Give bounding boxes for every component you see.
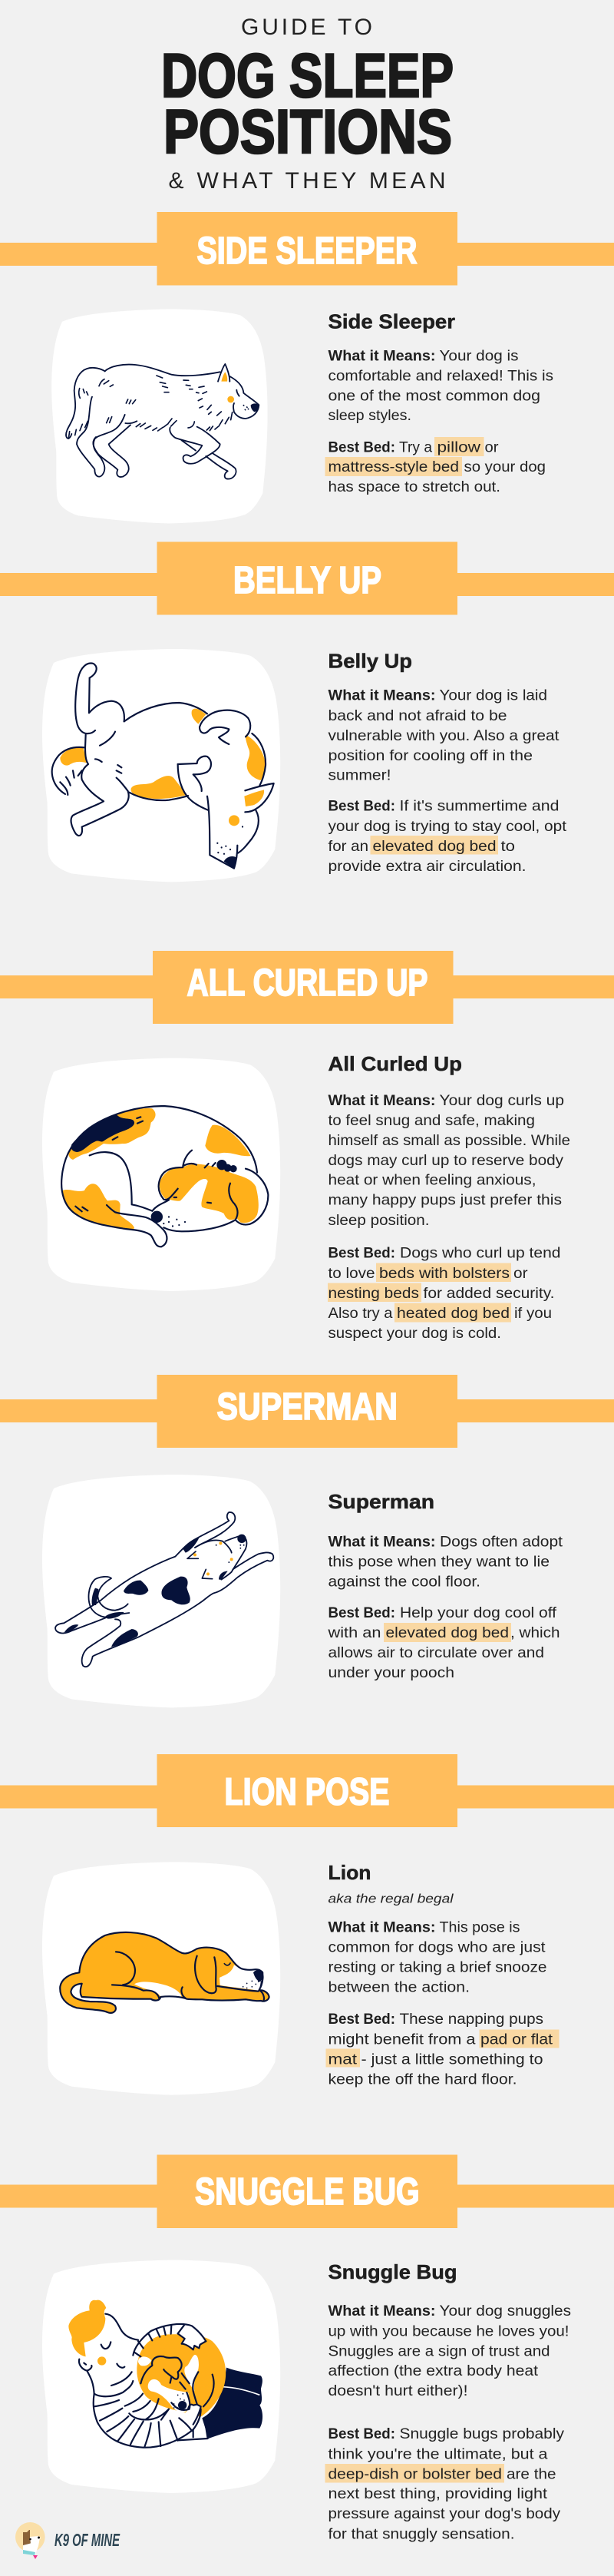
text block: lion pose: might benefit from a (328, 2031, 476, 2048)
text block: belly up: elevated dog bed (373, 838, 496, 855)
text block: lion pose: Best Bed: (328, 2011, 395, 2028)
text block: lion pose: mat (328, 2051, 358, 2068)
text block: all curled up: himself as small as possible. While (328, 1132, 570, 1149)
text block: belly up: position for cooling off in the (328, 747, 533, 764)
text block: belly up: for an (328, 838, 368, 855)
title: GUIDE TO (241, 15, 372, 40)
text block: snuggle bug: Snuggle bugs probably (399, 2425, 564, 2442)
text block: all curled up (328, 1052, 570, 1342)
text block: snuggle bug: What it Means: (328, 2303, 436, 2319)
banner: belly up: BELLY UP (233, 560, 381, 601)
text block: all curled up: beds with bolsters (379, 1265, 510, 1282)
text block: lion pose: resting or taking a brief snooze (328, 1958, 546, 1975)
text block: lion pose: These napping pups (399, 2011, 543, 2028)
text block: all curled up: heat or when feeling anxious, (328, 1172, 536, 1189)
text block: superman: Best Bed: (328, 1604, 395, 1621)
text block: lion pose: - just a little something to (361, 2051, 543, 2068)
text block: all curled up: dogs may curl up to reserve body (328, 1152, 563, 1169)
text block: all curled up: to feel snug and safe, making (328, 1112, 535, 1129)
text block: snuggle bug: up with you because he loves you! (328, 2323, 569, 2339)
text block: superman: elevated dog bed (385, 1624, 509, 1641)
panel: belly up (0, 542, 614, 882)
illustration: superman dog (42, 1475, 280, 1707)
panel: lion pose (0, 1754, 614, 2095)
text block: all curled up: What it Means: (328, 1092, 436, 1109)
text block: superman: with an (327, 1624, 381, 1641)
text block: all curled up: All Curled Up (328, 1052, 462, 1075)
text block: snuggle bug: deep-dish or bolster bed (328, 2465, 502, 2482)
text block: lion pose: common for dogs who are just (328, 1939, 546, 1955)
text block: snuggle bug: affection (the extra body heat (328, 2362, 539, 2379)
text block: all curled up: suspect your dog is cold. (328, 1325, 501, 1342)
icon: dog head (15, 2522, 45, 2559)
text block: side sleeper: so your dog (464, 459, 546, 475)
text block: belly up: to (500, 838, 515, 855)
banner: snuggle bug: SNUGGLE BUG (195, 2171, 419, 2213)
text block: snuggle bug: think you're the ultimate, but a (328, 2445, 548, 2462)
text block: superman: allows air to circulate over and (328, 1644, 544, 1661)
text block: belly up: What it Means: (328, 687, 436, 704)
illustration: side sleeping dog (51, 309, 268, 524)
text block: belly up: provide extra air circulation. (328, 858, 527, 875)
text block: belly up: Belly Up (328, 650, 412, 673)
text block: side sleeper: one of the most common dog (328, 387, 540, 404)
text block: belly up: vulnerable with you. Also a great (328, 727, 560, 744)
panel: snuggle bug (0, 2155, 614, 2542)
text block: belly up: your dog is trying to stay cool, opt (328, 818, 567, 835)
text block: superman: this pose when they want to lie (328, 1553, 550, 1570)
text block: all curled up: or (513, 1265, 528, 1282)
text block: snuggle bug: Snuggle Bug (328, 2260, 457, 2283)
illustration: dog belly up (42, 649, 280, 882)
illustration: curled up dog (42, 1058, 280, 1291)
text block: lion pose (325, 1861, 559, 2088)
text block: side sleeper (325, 310, 553, 495)
banner: snuggle bug (0, 2155, 614, 2228)
text block: side sleeper: has space to stretch out. (328, 478, 500, 495)
banner: superman (0, 1375, 614, 1448)
text block: all curled up: nesting beds (328, 1285, 419, 1302)
illustration: lion pose dog (42, 1862, 280, 2095)
text block: belly up: summer! (328, 767, 391, 783)
text block: side sleeper: mattress-style bed (328, 459, 459, 475)
panel: superman (0, 1375, 614, 1707)
text block: side sleeper: What it Means: (328, 347, 436, 364)
text block: side sleeper: pillow (437, 439, 481, 456)
text block: side sleeper: sleep styles. (328, 407, 411, 424)
text block: all curled up: Your dog curls up (439, 1092, 564, 1109)
text block: snuggle bug: for that snuggly sensation. (328, 2525, 514, 2542)
title: DOG SLEEP (161, 41, 454, 111)
text block: all curled up: to love (328, 1265, 375, 1282)
panel: all curled up (0, 951, 614, 1342)
text block: side sleeper: Best Bed: (328, 439, 395, 456)
text block: belly up: If it's summertime and (399, 797, 559, 814)
text block: belly up: Best Bed: (328, 797, 395, 814)
banner: all curled up: ALL CURLED UP (187, 962, 428, 1004)
text block: all curled up: sleep position. (328, 1212, 430, 1229)
text block: lion pose: Lion (328, 1861, 371, 1884)
title: & WHAT THEY MEAN (169, 168, 445, 194)
text block: belly up (328, 650, 567, 875)
illustration: person snuggling dog (42, 2260, 280, 2493)
banner: side sleeper: SIDE SLEEPER (196, 230, 418, 272)
text block: all curled up: heated dog bed (397, 1305, 510, 1322)
text block: superman: against the cool floor. (328, 1573, 480, 1590)
text block: snuggle bug (325, 2260, 571, 2542)
text block: all curled up: Best Bed: (328, 1244, 395, 1261)
text block: snuggle bug: doesn't hurt either)! (328, 2382, 468, 2399)
text block: lion pose: pad or flat (480, 2031, 553, 2048)
text block: side sleeper: or (485, 439, 499, 456)
text block: snuggle bug: next best thing, providing light (328, 2485, 548, 2502)
title (161, 15, 454, 194)
text block: superman: Dogs often adopt (440, 1533, 563, 1550)
text block: snuggle bug: are the (507, 2465, 556, 2482)
text block: superman: under your pooch (328, 1664, 454, 1681)
text block: superman (327, 1490, 563, 1681)
text block: superman: Superman (328, 1490, 434, 1513)
text block: snuggle bug: Your dog snuggles (439, 2303, 571, 2319)
banner: belly up (0, 542, 614, 614)
text block: all curled up: Dogs who curl up tend (400, 1244, 560, 1261)
text block: side sleeper: Side Sleeper (328, 310, 455, 333)
banner: lion pose (0, 1754, 614, 1827)
banner: side sleeper (0, 212, 614, 286)
text block: lion pose: aka the regal begal (328, 1892, 454, 1906)
text block: belly up: back and not afraid to be (328, 707, 507, 724)
banner: lion pose: LION POSE (224, 1771, 390, 1813)
text block: superman: What it Means: (328, 1533, 436, 1550)
banner: superman: SUPERMAN (216, 1386, 398, 1428)
text block: snuggle bug: Best Bed: (328, 2425, 395, 2442)
text block: superman: Help your dog cool off (400, 1604, 557, 1621)
text block: lion pose: keep the off the hard floor. (328, 2071, 517, 2088)
text block: all curled up: if you (514, 1305, 552, 1322)
text block: lion pose: This pose is (439, 1919, 520, 1935)
banner: all curled up (0, 951, 614, 1024)
title: POSITIONS (163, 98, 452, 167)
text block: lion pose: What it Means: (328, 1919, 436, 1935)
text block: all curled up: many happy pups just prefer this (328, 1192, 562, 1209)
text block: snuggle bug: pressure against your dog's body (328, 2505, 560, 2522)
text block: all curled up: for added security. (424, 1285, 554, 1302)
logo: K9 of Mine: K9 OF MINE (54, 2530, 120, 2550)
text block: side sleeper: comfortable and relaxed! This is (328, 367, 553, 384)
logo: K9 of Mine (15, 2522, 120, 2559)
text block: all curled up: Also try a (328, 1305, 393, 1322)
text block: lion pose: between the action. (328, 1978, 470, 1995)
text block: snuggle bug: Snuggles are a sign of trust and (328, 2343, 550, 2359)
text block: belly up: Your dog is laid (439, 687, 547, 704)
text block: superman: , which (510, 1624, 560, 1641)
text block: side sleeper: Your dog is (439, 347, 519, 364)
panel: side sleeper (0, 212, 614, 524)
text block: side sleeper: Try a (399, 439, 432, 456)
